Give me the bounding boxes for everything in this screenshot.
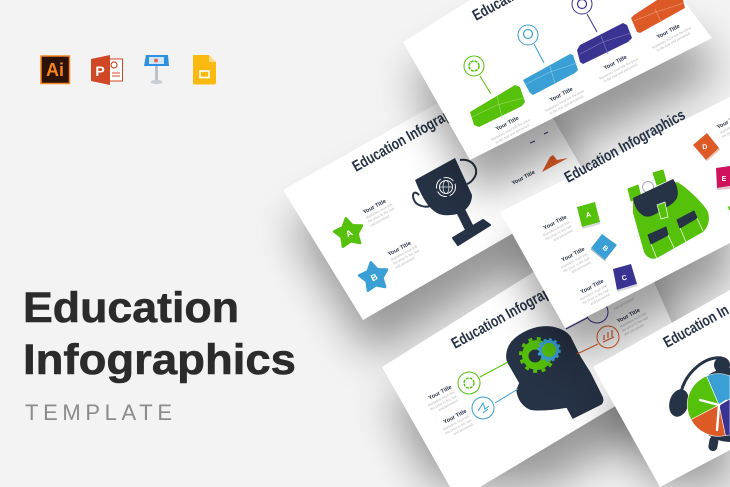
text block: book B [557,246,593,277]
text block: B: the price to the real [392,248,420,266]
text block: book B: and perceived. [571,260,592,274]
icon: orange box [631,0,685,33]
text block: book A: and perceived. [553,228,574,242]
icon: blue box [518,25,578,95]
icon: blue node [472,389,518,419]
icon: book D: D [702,144,708,151]
icon: PowerPoint: P [95,63,105,79]
text block: B: and perceived. [394,256,416,270]
text block: book B: Marketers must link [560,252,588,270]
panel: box slide [403,0,720,196]
text block: A: Your Title [362,199,387,216]
text block: A: the price to the real [367,206,395,224]
text block: book C: and perceived. [590,292,611,306]
text block: C: Your Title [511,170,536,187]
icon: Google Slides [193,55,216,84]
icon: purple box [572,0,632,64]
icon: book B: B [601,245,609,253]
icon: book A: A [585,212,592,220]
text block: B [387,239,422,270]
text block: orange node: Your Title [616,308,641,325]
text block: blue node: the price to the real [445,418,472,435]
icon: book E [716,166,730,190]
text block: green node: the price to the real [430,394,457,411]
text block: orange box: Marketers must link the price [652,26,692,50]
icon: book C [613,264,638,292]
icon: PowerPoint [91,55,122,85]
text block: orange box: to the real and perceived. [656,31,692,53]
icon: green book fragment [728,206,730,210]
text block: book C [576,278,612,309]
text block: book B: the price to the real [563,256,590,273]
icon: Adobe Illustrator [41,56,70,84]
text block: green box: Your Title [495,116,520,133]
subtitle: TEMPLATE [25,400,172,425]
text block: blue box [541,82,587,117]
icon: backpack [628,170,709,259]
panel: backpack slide [500,97,730,364]
text block: B: Marketers must link [390,244,418,262]
icon: book B [591,234,617,262]
icon: Keynote [144,55,169,84]
text block: book A [539,214,575,245]
icon: book A [577,202,600,229]
text block: purple node: and perceived. [613,297,635,311]
icon: navy fragment [530,132,548,143]
text block: green box [487,111,533,146]
text block: orange node: and perceived. [623,323,645,337]
icon: orange hat [542,155,568,172]
panel: head slide [382,215,697,487]
chart: alarm clock pie [666,357,730,452]
text block: B: Your Title [387,241,412,258]
icon: trophy [413,158,490,245]
icon: head silhouette with gears [507,327,603,418]
icon: green node [458,362,508,394]
icon: green box [464,56,525,127]
text block: purple box: Marketers must link the price [599,57,639,81]
icon: orange node [577,326,619,354]
text block: purple box: to the real and perceived. [603,62,639,84]
text block: green node: Marketers must link [427,390,455,408]
icon: Adobe Illustrator: Ai [46,60,64,80]
heading: head slide title: Education Infographics [449,272,575,352]
text block: green node [424,384,460,415]
heading: trophy slide title: Education Infographics [350,94,475,175]
text block: orange node: Marketers must link [619,311,647,329]
icon: star B [357,259,391,292]
text block: green node: and perceived. [438,398,459,412]
icon: star B: B [369,271,380,283]
text block: book B: Your Title [561,246,586,264]
text block: A [362,197,397,228]
text block: purple box: Your Title [603,55,628,72]
text block: book C: Marketers must link [579,284,607,302]
icon: star A [332,215,366,248]
text block: book D [716,114,730,139]
text block: A: and perceived. [369,214,391,228]
text block: book A: Your Title [543,214,568,232]
title [23,284,296,384]
icon: book C: C [621,275,628,283]
text block: purple box [595,50,641,85]
text block: book A: Marketers must link [542,220,570,238]
text block: green node: Your Title [428,384,453,402]
heading: backpack slide title: Education Infographics [562,107,688,187]
text block: orange box: Your Title [656,24,681,41]
text block: orange node [616,306,651,337]
title: Infographics [23,336,296,384]
text block: blue box: Marketers must link the price [545,89,585,113]
text block: orange node: the price to the real [621,315,649,333]
icon: star A: A [344,227,355,239]
text block: green box: Marketers must link the price [491,118,531,142]
text block: blue node: Your Title [443,408,468,426]
text block: A: Marketers must link [365,202,393,220]
icon: book D [693,133,720,161]
text block: book C: Your Title [580,278,605,296]
text block: blue box: to the real and perceived. [549,94,585,116]
text block: blue box: Your Title [549,87,574,104]
text block: green box: to the real and perceived. [495,123,531,145]
text block: blue node [439,408,475,439]
panel: trophy slide [283,58,601,356]
text block: orange box [648,19,694,54]
text block: book C: the price to the real [582,288,609,305]
icon: purple node [566,301,608,329]
text block: book A: the price to the real [545,224,572,241]
text block: blue node: and perceived. [453,422,474,436]
panel: clock slide [593,290,730,487]
icon: book E: E [722,176,727,183]
text block: blue node: Marketers must link [442,414,470,432]
title: Education [23,284,239,332]
